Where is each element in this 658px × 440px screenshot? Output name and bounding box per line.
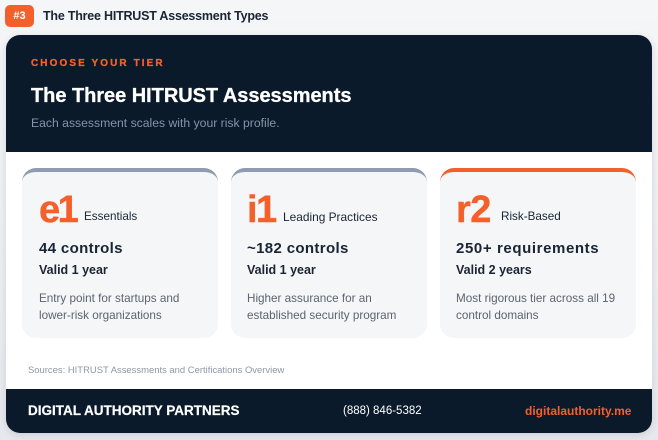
- description: Entry point for startups and: [39, 292, 179, 305]
- tier name: Risk-Based: [501, 210, 561, 223]
- website: digitalauthority.me: [525, 404, 631, 418]
- main heading: The Three HITRUST Assessments: [31, 85, 351, 107]
- sources note: Sources: HITRUST Assessments and Certifications Overview: [28, 365, 284, 376]
- subheading: Each assessment scales with your risk profile.: [31, 116, 280, 130]
- requirement count: 250+ requirements: [456, 240, 599, 257]
- card: i1 Leading Practices: [231, 168, 427, 338]
- phone number: (888) 846-5382: [343, 405, 422, 417]
- page title: The Three HITRUST Assessment Types: [43, 9, 268, 23]
- tier code: i1: [247, 189, 276, 231]
- eyebrow label: CHOOSE YOUR TIER: [31, 58, 165, 69]
- card: r2 Risk-Based: [440, 168, 636, 338]
- validity: Valid 1 year: [39, 263, 108, 277]
- tier code: r2: [456, 189, 491, 231]
- card: e1 Essentials: [22, 168, 218, 338]
- description: established security program: [247, 309, 396, 322]
- description: [39, 292, 179, 322]
- description: [247, 292, 396, 322]
- tier name: Leading Practices: [283, 210, 378, 224]
- badge: #3: [5, 5, 34, 27]
- badge: #3: #3: [13, 10, 26, 22]
- description: [456, 292, 615, 322]
- description: control domains: [456, 309, 539, 322]
- control count: ~182 controls: [247, 240, 349, 257]
- tier code: e1: [39, 189, 76, 231]
- validity: Valid 1 year: [247, 263, 316, 277]
- control count: 44 controls: [39, 240, 123, 257]
- panel: header: [6, 35, 652, 152]
- tier name: Essentials: [84, 210, 137, 223]
- description: lower-risk organizations: [39, 309, 162, 322]
- panel: footer: [6, 389, 652, 433]
- description: Higher assurance for an: [247, 292, 372, 305]
- brand name: DIGITAL AUTHORITY PARTNERS: [28, 403, 240, 418]
- validity: Valid 2 years: [456, 263, 532, 277]
- description: Most rigorous tier across all 19: [456, 292, 615, 305]
